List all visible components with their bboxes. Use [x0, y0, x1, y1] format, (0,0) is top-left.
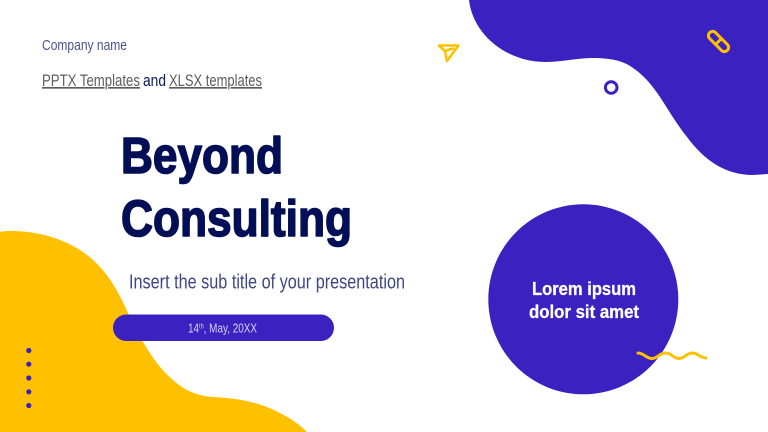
dots column — [26, 348, 31, 408]
link: PPTX Templates: PPTX Templates — [42, 72, 140, 90]
callout line 2: dolor sit amet — [529, 302, 639, 322]
circle callout — [488, 204, 678, 394]
icon: capsule — [707, 30, 730, 53]
text: and: and — [143, 72, 166, 90]
text: company name: Company name — [42, 37, 127, 54]
link: XLSX templates: XLSX templates — [169, 72, 262, 90]
title line 1: Beyond — [121, 127, 283, 184]
date text: 14 — [188, 322, 202, 336]
blob: top right purple — [469, 0, 768, 175]
icon: paper plane — [439, 46, 458, 61]
title — [121, 127, 352, 247]
title line 2: Consulting — [121, 190, 352, 247]
date text: th — [199, 324, 204, 330]
text: template links — [42, 72, 262, 90]
squiggle — [638, 353, 706, 358]
icon: ring — [605, 82, 617, 93]
date text: , May, 20XX — [204, 322, 258, 336]
callout line 1: Lorem ipsum — [532, 279, 636, 299]
blob: bottom left yellow — [0, 231, 307, 432]
subtitle: Insert the sub title of your presentation — [129, 272, 405, 294]
date pill — [113, 314, 334, 341]
